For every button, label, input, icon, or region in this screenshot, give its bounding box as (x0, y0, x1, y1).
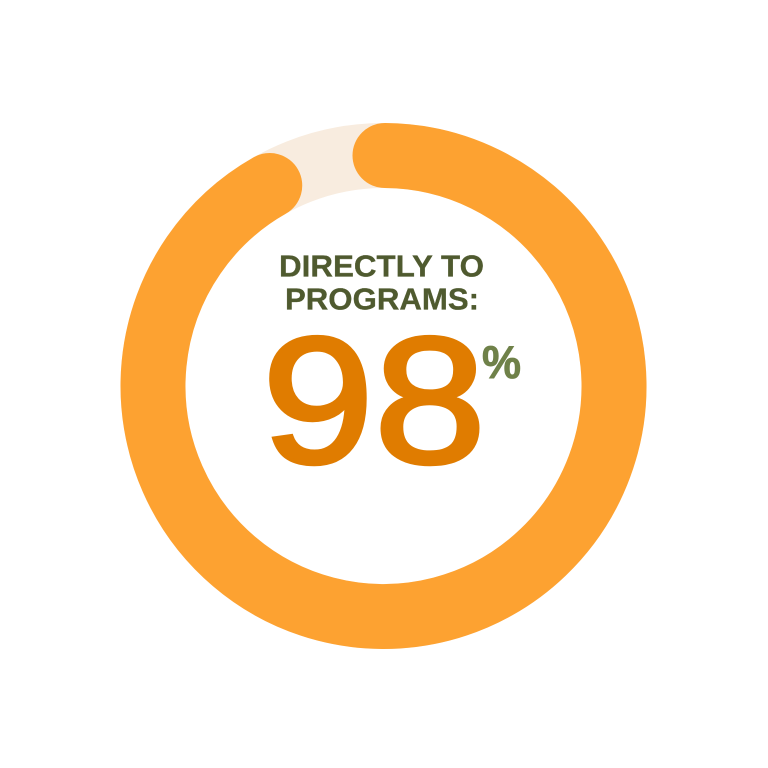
heading: directly to programs: DIRECTLY TO (279, 248, 484, 284)
heading: directly to programs (279, 248, 484, 316)
percent sign: % (482, 336, 521, 388)
big number: 98: 98 (262, 300, 486, 502)
heading: directly to programs: PROGRAMS: (285, 282, 479, 316)
donut track (153, 156, 614, 616)
donut chart: 98 percent (153, 156, 614, 616)
donut value arc (153, 156, 614, 616)
